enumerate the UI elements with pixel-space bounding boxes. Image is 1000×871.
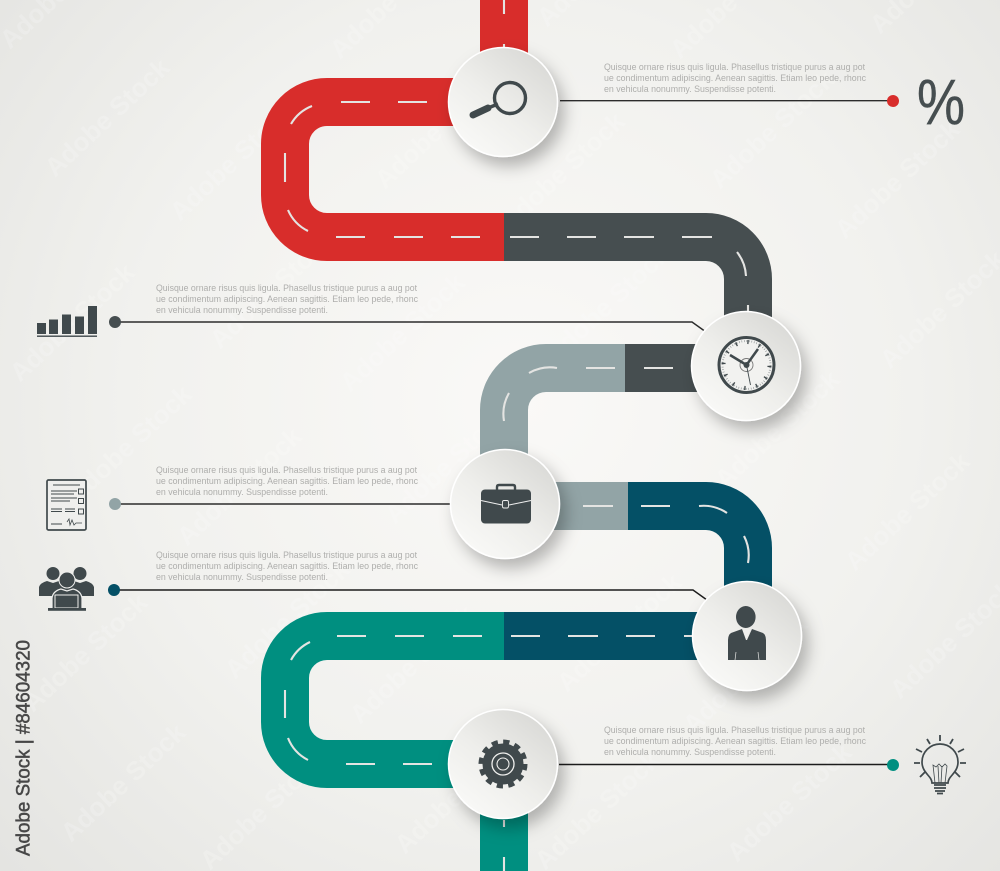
leader line 5 with teal dot [559, 759, 899, 771]
text block 4 [156, 550, 418, 582]
watermarks: Adobe Stock [4, 257, 141, 387]
watermarks: Adobe Stock [55, 717, 192, 847]
watermarks: Adobe Stock [171, 421, 308, 551]
text block 3: Quisque ornare risus quis ligula. Phasellus tristique purus a aug pot [156, 465, 417, 475]
watermarks: Adobe Stock [17, 587, 154, 717]
watermarks: Adobe Stock [539, 239, 676, 369]
text block 4: Quisque ornare risus quis ligula. Phasellus tristique purus a aug pot [156, 550, 417, 560]
text block 1: Quisque ornare risus quis ligula. Phasellus tristique purus a aug pot [604, 62, 865, 72]
watermarks: Adobe Stock [551, 567, 688, 697]
watermarks: Adobe Stock [389, 729, 526, 859]
road: red section [285, 0, 504, 237]
text block 2: Quisque ornare risus quis ligula. Phasellus tristique purus a aug pot [156, 283, 417, 293]
text block 4: en vehicula nonummy. Suspendisse potenti. [156, 572, 328, 582]
watermarks: Adobe Stock [334, 267, 471, 397]
watermarks: Adobe Stock [709, 364, 846, 494]
watermarks: Adobe Stock [369, 64, 506, 194]
watermarks: Adobe Stock [204, 224, 341, 354]
text block 5: ue condimentum adipiscing. Aenean sagittis. Etiam leo pede, rhonc [604, 736, 866, 746]
icon: businessman [728, 606, 766, 660]
watermarks: Adobe Stock [704, 64, 841, 194]
text block 1: ue condimentum adipiscing. Aenean sagittis. Etiam leo pede, rhonc [604, 73, 866, 83]
watermarks: Adobe Stock [344, 599, 481, 729]
watermarks: Adobe Stock [219, 554, 356, 684]
disc 3: briefcase [450, 450, 560, 558]
watermarks: Adobe Stock [164, 96, 301, 226]
icon: magnifier [473, 82, 526, 115]
leader line 1 with red dot [560, 95, 899, 107]
text block 3 [156, 465, 418, 497]
leader line 4 with blue dot [108, 584, 707, 600]
road: dark grey section [504, 237, 748, 368]
watermarks: Adobe Stock [721, 737, 858, 867]
icon: clock [719, 338, 774, 392]
watermarks: Adobe Stock [829, 114, 966, 244]
disc 2: clock [692, 312, 800, 420]
leader line 2 with dark dot [109, 316, 706, 332]
text block 5 [604, 725, 866, 757]
watermarks: Adobe Stock [61, 379, 198, 509]
disc 1: magnifier [448, 48, 558, 156]
watermarks: Adobe Stock [839, 446, 976, 576]
watermarks: Adobe Stock [39, 52, 176, 182]
road: petrol blue section [504, 506, 749, 636]
text block 5: Quisque ornare risus quis ligula. Phasellus tristique purus a aug pot [604, 725, 865, 735]
vertical stock label: Adobe Stock | #84604320 [14, 640, 34, 856]
road: grey-green section [503, 367, 628, 506]
text block 5: en vehicula nonummy. Suspendisse potenti. [604, 747, 776, 757]
text block 4: ue condimentum adipiscing. Aenean sagittis. Etiam leo pede, rhonc [156, 561, 418, 571]
icon: light bulb [914, 735, 966, 794]
text block 3: en vehicula nonummy. Suspendisse potenti. [156, 487, 328, 497]
icon: gear [481, 742, 525, 786]
text block 2: ue condimentum adipiscing. Aenean sagittis. Etiam leo pede, rhonc [156, 294, 418, 304]
icon: briefcase [481, 485, 531, 524]
icon: bar chart [37, 306, 97, 337]
icon: percent: % [917, 66, 965, 138]
icon: team with laptop [39, 567, 94, 611]
icon: document [47, 480, 86, 530]
text block 2 [156, 283, 418, 315]
watermarks: Adobe Stock [677, 609, 814, 739]
watermarks: Adobe Stock [379, 399, 516, 529]
text block 1: en vehicula nonummy. Suspendisse potenti. [604, 84, 776, 94]
text block 3: ue condimentum adipiscing. Aenean sagittis. Etiam leo pede, rhonc [156, 476, 418, 486]
text block 2: en vehicula nonummy. Suspendisse potenti. [156, 305, 328, 315]
disc 5: gear [448, 710, 558, 818]
disc 4: businessman [692, 582, 802, 690]
road: teal section [285, 636, 504, 871]
leader line 3 with grey dot [109, 498, 452, 510]
watermarks: Adobe Stock [494, 106, 631, 236]
text block 1 [604, 62, 866, 94]
